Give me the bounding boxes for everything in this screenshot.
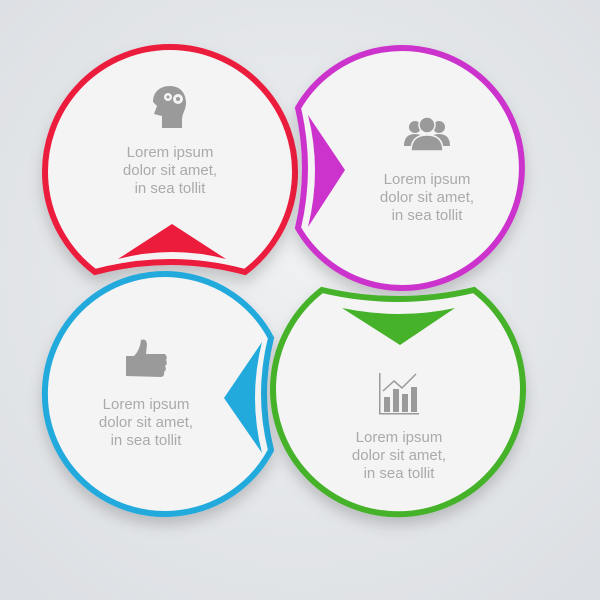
icon: chart — [379, 373, 419, 414]
icon: thumbs up — [126, 340, 167, 377]
text: green: dolor sit amet, — [352, 447, 446, 464]
text: red: in sea tollit — [135, 180, 206, 197]
icon: people — [404, 117, 450, 151]
text: purple: Lorem ipsum — [384, 171, 470, 188]
arrow: blue — [224, 342, 262, 453]
panel: green circle — [273, 290, 523, 514]
arrow: red — [118, 224, 226, 259]
text: green: in sea tollit — [364, 465, 435, 482]
text: purple — [380, 171, 474, 224]
text: red — [123, 144, 217, 197]
text: purple: in sea tollit — [392, 207, 463, 224]
text: green — [352, 429, 446, 482]
arrow: green — [342, 308, 455, 345]
text: blue: dolor sit amet, — [99, 414, 193, 431]
text: blue: in sea tollit — [111, 432, 182, 449]
icon: head with gears — [153, 86, 186, 128]
panel: red circle — [45, 47, 295, 272]
arrow: purple — [308, 115, 345, 227]
panel: purple circle — [298, 48, 522, 288]
text: red: Lorem ipsum — [127, 144, 213, 161]
text: blue — [99, 396, 193, 449]
text: purple: dolor sit amet, — [380, 189, 474, 206]
text: red: dolor sit amet, — [123, 162, 217, 179]
text: green: Lorem ipsum — [356, 429, 442, 446]
text: blue: Lorem ipsum — [103, 396, 189, 413]
panel: blue circle — [45, 274, 271, 514]
